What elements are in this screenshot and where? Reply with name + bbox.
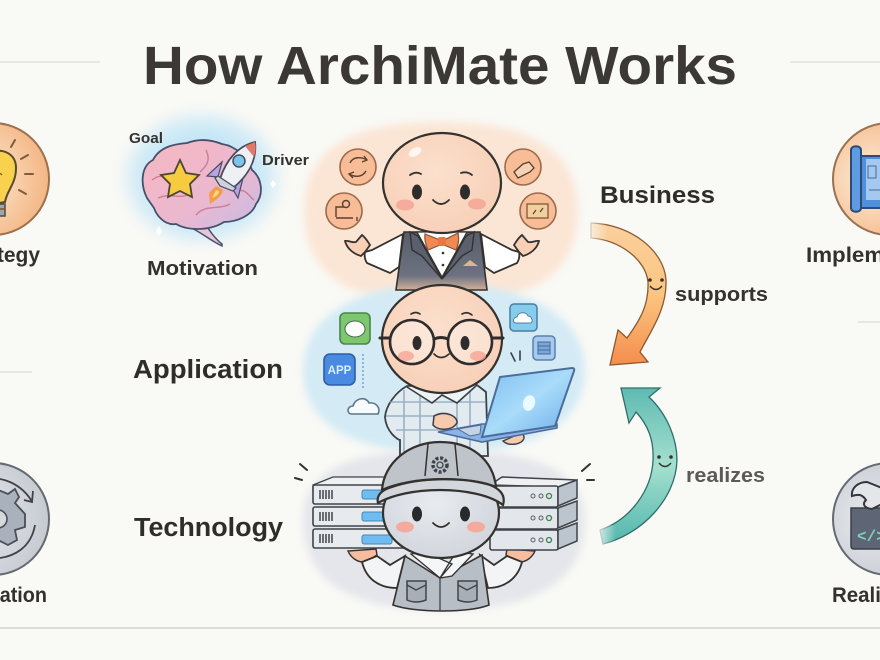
icon: process loop: [340, 149, 376, 185]
icon: plaid shirt body: [385, 385, 524, 456]
panel: realization: [832, 463, 880, 607]
icon: head with hard hat: [378, 442, 504, 558]
icon: laptop: [438, 368, 574, 442]
icon: gear with cycle arrows: [0, 463, 49, 575]
character: business: [326, 133, 556, 290]
panel: implementation: [806, 123, 880, 267]
label: goal: Goal: [129, 131, 163, 147]
label: business: Business: [600, 182, 715, 209]
icon: vest body: [345, 232, 539, 290]
label: realizes: realizes: [686, 465, 765, 487]
icon: server rack left: [313, 477, 405, 548]
label: motivation: Motivation: [147, 257, 258, 280]
icon: app tile: [324, 354, 355, 385]
label: application: Application: [133, 356, 283, 384]
character: application: [324, 285, 574, 456]
icon: actor: [326, 193, 362, 229]
panel: motivation: [116, 106, 309, 280]
icon: wrench and code: [833, 463, 880, 575]
label: driver: Driver: [262, 153, 309, 169]
panel: layer backdrops: [303, 122, 585, 610]
arrow: supports: [584, 218, 666, 365]
icon: server rack right: [490, 477, 577, 550]
icon: body with vest: [348, 549, 535, 611]
icon: head: [383, 133, 501, 233]
icon: cloud tile: [510, 304, 537, 331]
icon: chat app: [340, 313, 370, 344]
icon: blueprint: [833, 123, 880, 235]
title: How ArchiMate Works: [143, 36, 737, 96]
icon: chart card: [520, 193, 556, 229]
arrow: realizes: [594, 388, 677, 549]
icon: light bulb: [0, 123, 49, 235]
icon: brain with star and rocket: [116, 106, 288, 250]
icon: tool: [505, 149, 541, 185]
icon: app tile: APP: [328, 365, 352, 377]
icon: database tile: [533, 336, 555, 360]
label: supports: supports: [675, 284, 768, 306]
panel: strategy: [0, 123, 49, 267]
icon: cloud: [348, 354, 379, 414]
icon: head with glasses: [380, 285, 503, 393]
character: technology: [295, 442, 594, 611]
label: technology: Technology: [134, 514, 284, 542]
panel: automation: [0, 463, 49, 607]
